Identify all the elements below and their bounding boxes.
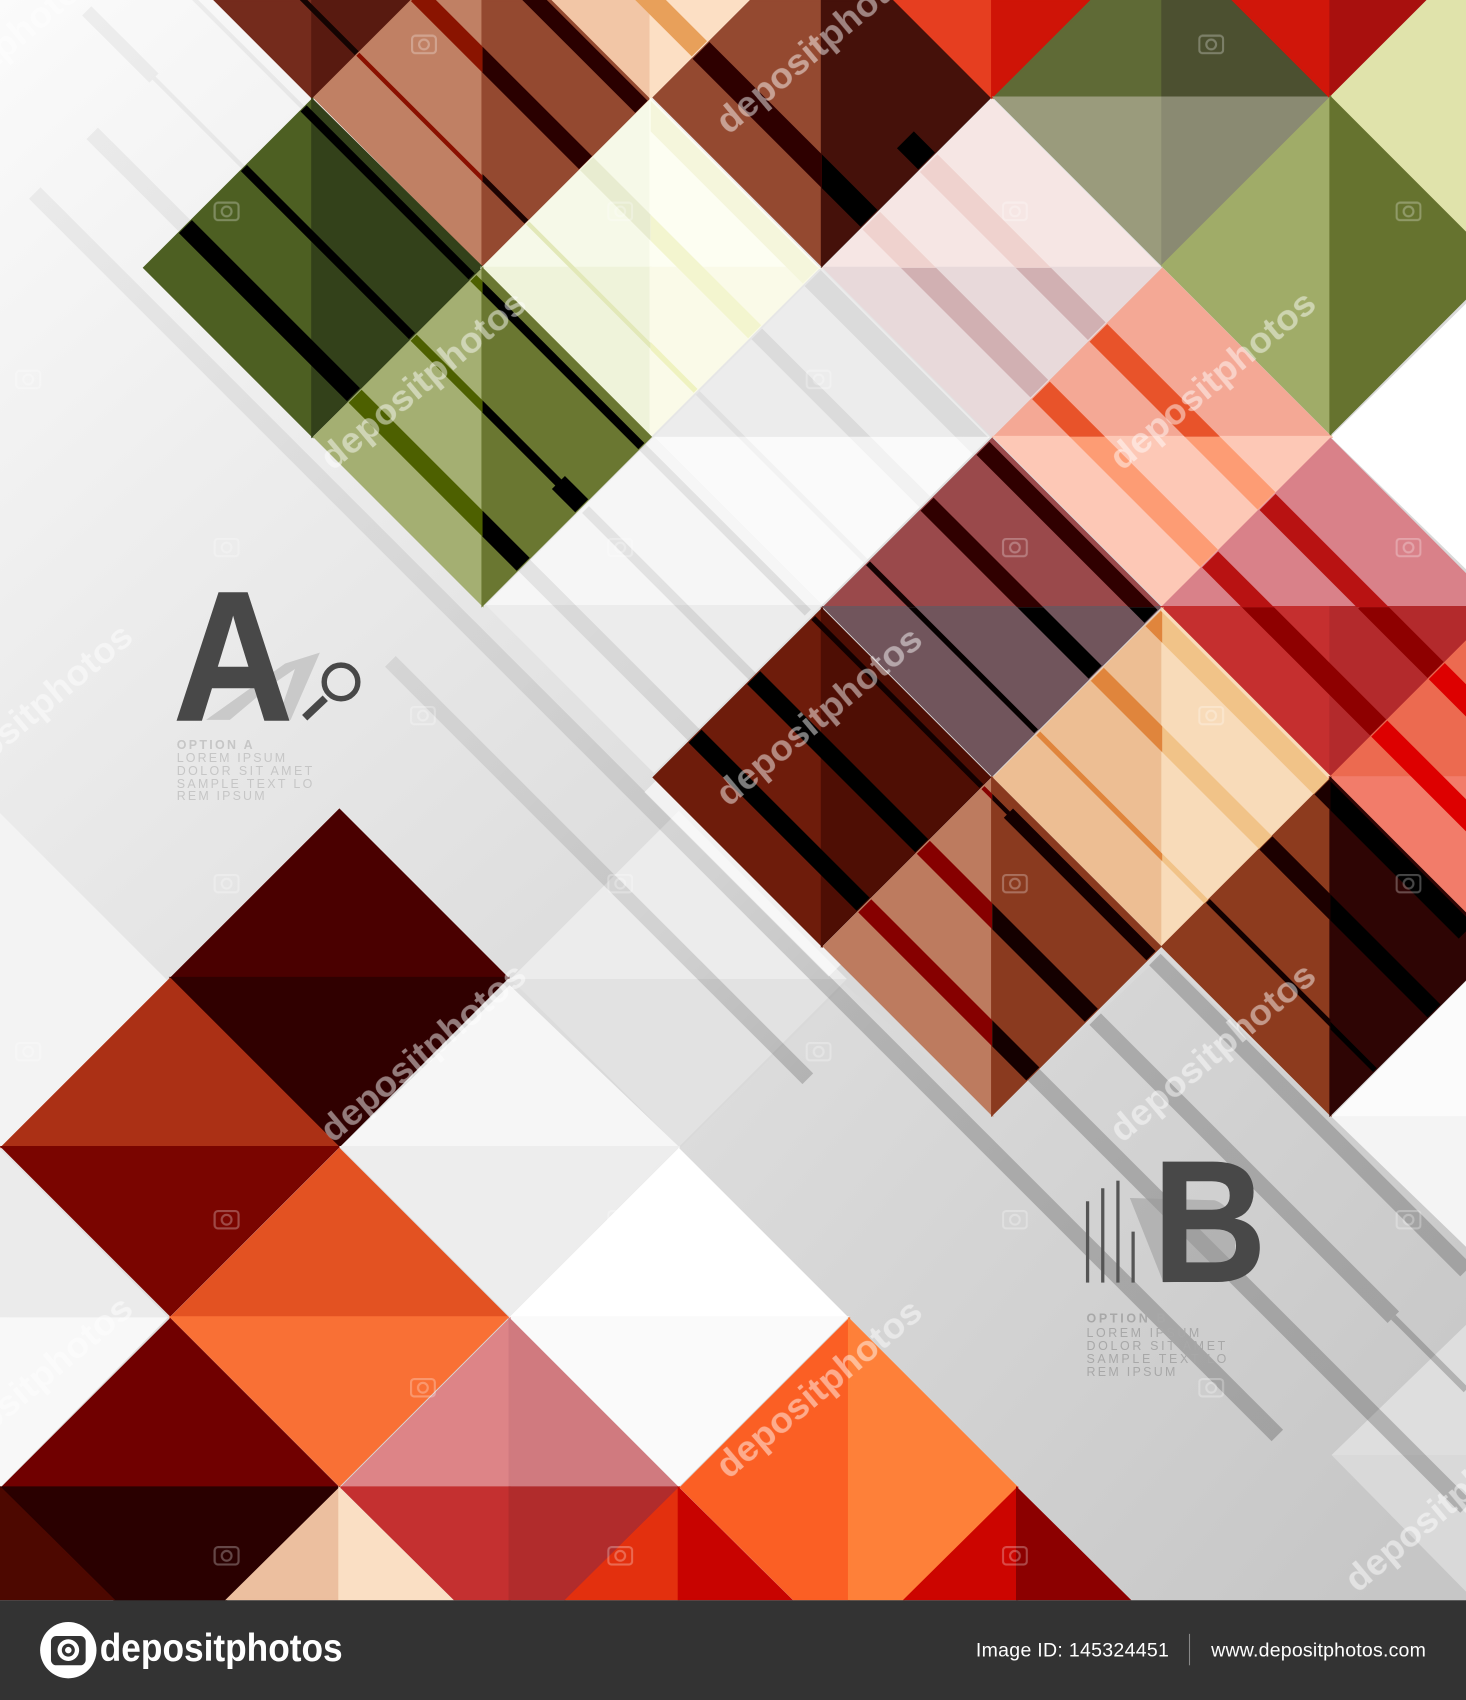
option B text: DOLOR SIT AMET xyxy=(1086,1339,1226,1353)
option A text: OPTION A xyxy=(177,738,253,752)
option B text: LOREM IPSUM xyxy=(1086,1326,1199,1340)
tile: pink and crimson xyxy=(342,1319,678,1599)
tile: pale pink xyxy=(824,100,1160,436)
option A text xyxy=(177,738,313,803)
option B text: OPTION B xyxy=(1086,1312,1166,1326)
tile: deep red xyxy=(2,1319,338,1600)
letter A shadow xyxy=(206,653,320,720)
tile: red-orange edge xyxy=(1330,642,1466,913)
tile: bright orange xyxy=(681,1319,1017,1599)
tile: top red xyxy=(895,0,1090,98)
tile group: right mosaic xyxy=(654,269,1466,1115)
tile: pale grey xyxy=(342,987,678,1315)
tile: dark green xyxy=(144,100,483,436)
tile: pale lime xyxy=(1330,0,1466,233)
tile: plum xyxy=(824,439,1160,775)
icon: depositphotos camera logo xyxy=(40,1622,97,1678)
footer bar xyxy=(0,1600,1466,1700)
tile: bottom crimson xyxy=(905,1489,1129,1599)
tile: bottom-left corner xyxy=(0,1488,113,1599)
logo wordmark: depositphotos xyxy=(100,1627,343,1670)
watermark text: depositphotos xyxy=(708,619,930,814)
icon: vertical bars xyxy=(1086,1181,1135,1283)
option B text xyxy=(1086,1312,1227,1379)
tile: sand xyxy=(994,609,1330,945)
site url: www.depositphotos.com xyxy=(1210,1640,1426,1662)
tile: rust xyxy=(2,979,338,1315)
option B block xyxy=(1086,1125,1266,1379)
watermark text: depositphotos xyxy=(312,955,534,1150)
tile: chestnut xyxy=(654,609,990,945)
option A text: LOREM IPSUM xyxy=(177,751,285,765)
tile: olive and grey xyxy=(994,0,1330,266)
tile: top peach xyxy=(553,0,748,98)
coloured tile stripes xyxy=(130,0,1466,1104)
separator xyxy=(1189,1634,1190,1665)
tile: dark brown xyxy=(654,0,990,266)
tile: white xyxy=(511,1149,847,1485)
watermark text: depositphotos xyxy=(708,1291,930,1486)
tile: rose and red xyxy=(1162,439,1466,775)
tile group: top mosaic xyxy=(144,0,1466,605)
tile: coral xyxy=(994,269,1330,605)
tile: bottom red xyxy=(567,1489,790,1599)
letter A: A xyxy=(173,554,293,760)
icon: magnifier xyxy=(305,665,358,718)
letter B shadow xyxy=(1130,1198,1235,1283)
tile: light green xyxy=(314,269,651,605)
option A block xyxy=(173,554,358,803)
tile: top-right red xyxy=(1233,0,1428,98)
tile: brown and black xyxy=(1162,778,1466,1115)
tile: top-left brown xyxy=(215,0,410,98)
tile: bottom peach xyxy=(228,1489,451,1599)
watermark text: depositphotos xyxy=(1102,955,1323,1150)
tile: salmon brown xyxy=(314,0,651,266)
watermark text: depositphotos xyxy=(312,283,534,478)
tile: terracotta xyxy=(824,778,1160,1115)
option B text: REM IPSUM xyxy=(1086,1365,1175,1379)
tile: orange xyxy=(171,1149,507,1485)
image id: Image ID: 145324451 xyxy=(976,1640,1169,1662)
tile: olive green right xyxy=(1162,98,1466,434)
option A text: DOLOR SIT AMET xyxy=(177,764,313,778)
tile: pale cream xyxy=(483,100,819,436)
option A text: REM IPSUM xyxy=(177,789,265,803)
tile: dark maroon xyxy=(171,810,507,1146)
letter B: B xyxy=(1153,1125,1266,1319)
tile group: bottom-left mosaic xyxy=(0,810,1129,1600)
option B text: SAMPLE TEXT LO xyxy=(1086,1352,1227,1366)
option A text: SAMPLE TEXT LO xyxy=(177,777,313,791)
watermark text: depositphotos xyxy=(1102,283,1323,478)
